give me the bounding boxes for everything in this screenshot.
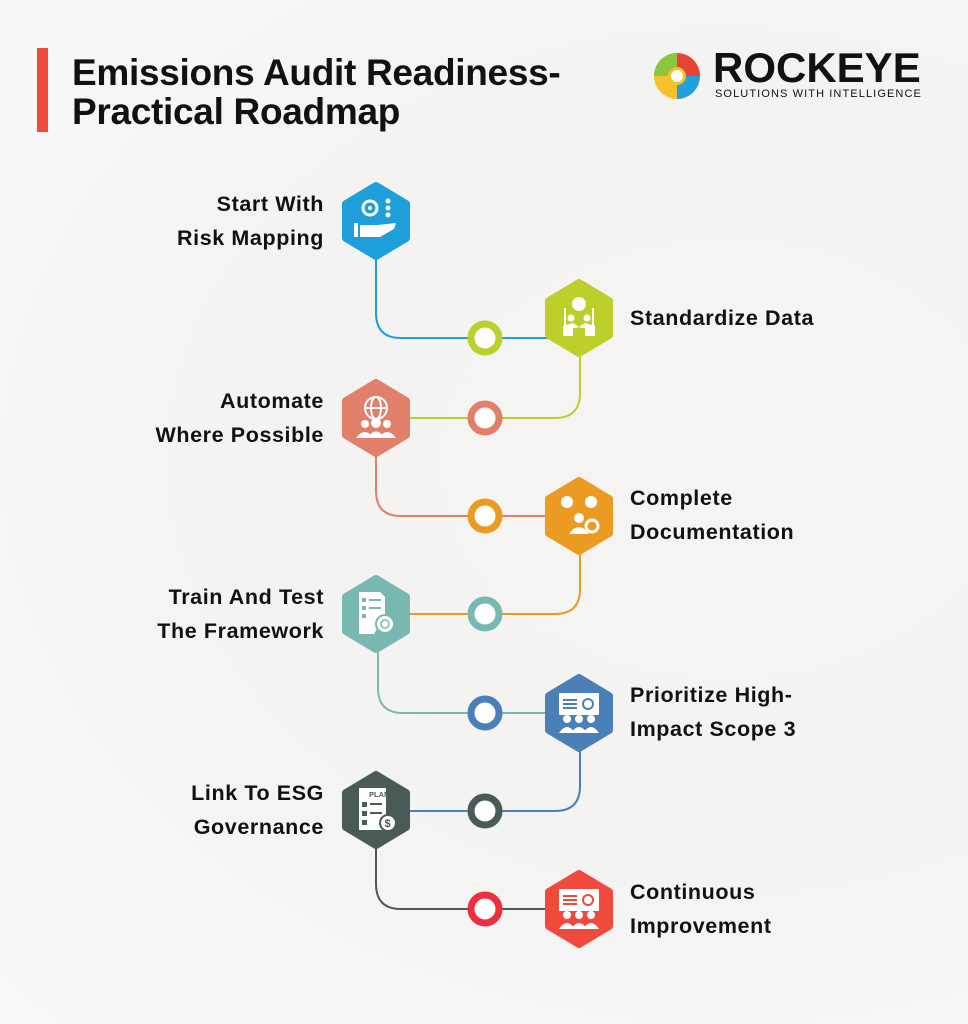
label 7: Governance: [194, 815, 324, 839]
logo: SOLUTIONS WITH INTELLIGENCE: [715, 88, 922, 100]
label 5: [157, 585, 324, 643]
step 5 hex: train and test: [346, 579, 406, 649]
step 6 hex: scope 3: [549, 678, 609, 748]
label 1: [177, 192, 324, 250]
label 6: Prioritize High-: [630, 683, 792, 707]
label 6: Impact Scope 3: [630, 717, 796, 741]
label 3: Automate: [220, 389, 324, 413]
label 4: Complete: [630, 486, 733, 510]
logo: ROCKEYE: [713, 44, 921, 91]
title: Practical Roadmap: [72, 91, 400, 132]
label 5: The Framework: [157, 619, 324, 643]
label 8: [630, 880, 772, 938]
step 7 hex: ESG governance: [346, 775, 406, 845]
label 5: Train And Test: [169, 585, 324, 609]
logo: [654, 44, 922, 100]
title: [72, 52, 560, 132]
label 8: Continuous: [630, 880, 755, 904]
connector circles: [471, 324, 499, 923]
step 1 hex: risk mapping: [346, 186, 406, 256]
label 2: Standardize Data: [630, 306, 814, 330]
label 4: Documentation: [630, 520, 794, 544]
step 7 hex: ESG governance: PLAN: [369, 790, 389, 799]
step 3 hex: automate: [346, 383, 406, 453]
title bar accent: [37, 48, 48, 132]
label 4: [630, 486, 794, 544]
label 7: Link To ESG: [191, 781, 324, 805]
label 1: Risk Mapping: [177, 226, 324, 250]
step 2 hex: standardize data: [549, 283, 609, 353]
step 7 hex: ESG governance: $: [384, 818, 391, 830]
title: Emissions Audit Readiness-: [72, 52, 560, 93]
step 4 hex: documentation: [549, 481, 609, 551]
label 3: Where Possible: [155, 423, 324, 447]
label 3: [155, 389, 324, 447]
step 8 hex: continuous improvement: [549, 874, 609, 944]
label 7: [191, 781, 324, 839]
label 1: Start With: [217, 192, 324, 216]
label 8: Improvement: [630, 914, 772, 938]
label 6: [630, 683, 796, 741]
